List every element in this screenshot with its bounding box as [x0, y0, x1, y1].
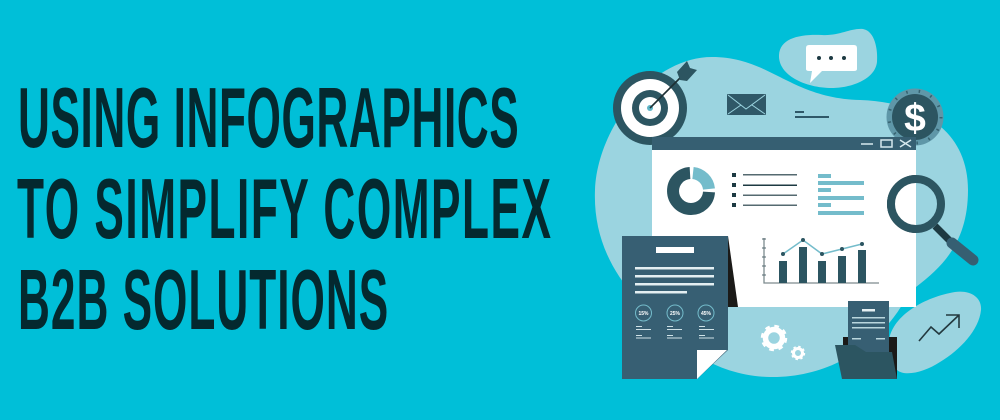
- document text lines: [635, 267, 714, 294]
- teal text bars: [818, 174, 864, 215]
- background blob: main: [595, 57, 968, 377]
- title: B2B SOLUTIONS: [18, 254, 388, 348]
- document heading: [656, 247, 694, 253]
- title: TO SIMPLIFY COMPLEX: [17, 163, 551, 257]
- title: USING INFOGRAPHICS: [18, 72, 519, 166]
- small text lines: [795, 111, 829, 118]
- icon: trend arrow: [919, 315, 959, 341]
- icon: magnifying glass: [887, 175, 973, 260]
- icon: target with dart: [613, 61, 697, 145]
- document stat circles: 45%: [701, 311, 712, 317]
- document stat circles: 25%: [670, 311, 681, 317]
- icon: dollar coin: [886, 88, 944, 146]
- icon: envelope: [727, 94, 766, 115]
- background blob: trend: [889, 292, 981, 373]
- panel: browser window: [652, 137, 916, 307]
- document stat circles: [636, 305, 714, 338]
- title: [17, 72, 551, 348]
- panel: report document: [622, 236, 738, 379]
- icon: folder with paper: [835, 301, 897, 379]
- window title bar: [652, 137, 916, 150]
- bar and line chart: [762, 238, 879, 283]
- bullet list: [732, 173, 797, 207]
- background blob: speech: [779, 29, 877, 88]
- document stat circles: 15%: [638, 311, 649, 317]
- icon: speech bubble: [806, 45, 857, 83]
- icon: dollar coin: $: [904, 97, 926, 140]
- icon: gears: [762, 326, 804, 359]
- donut chart: [673, 173, 709, 209]
